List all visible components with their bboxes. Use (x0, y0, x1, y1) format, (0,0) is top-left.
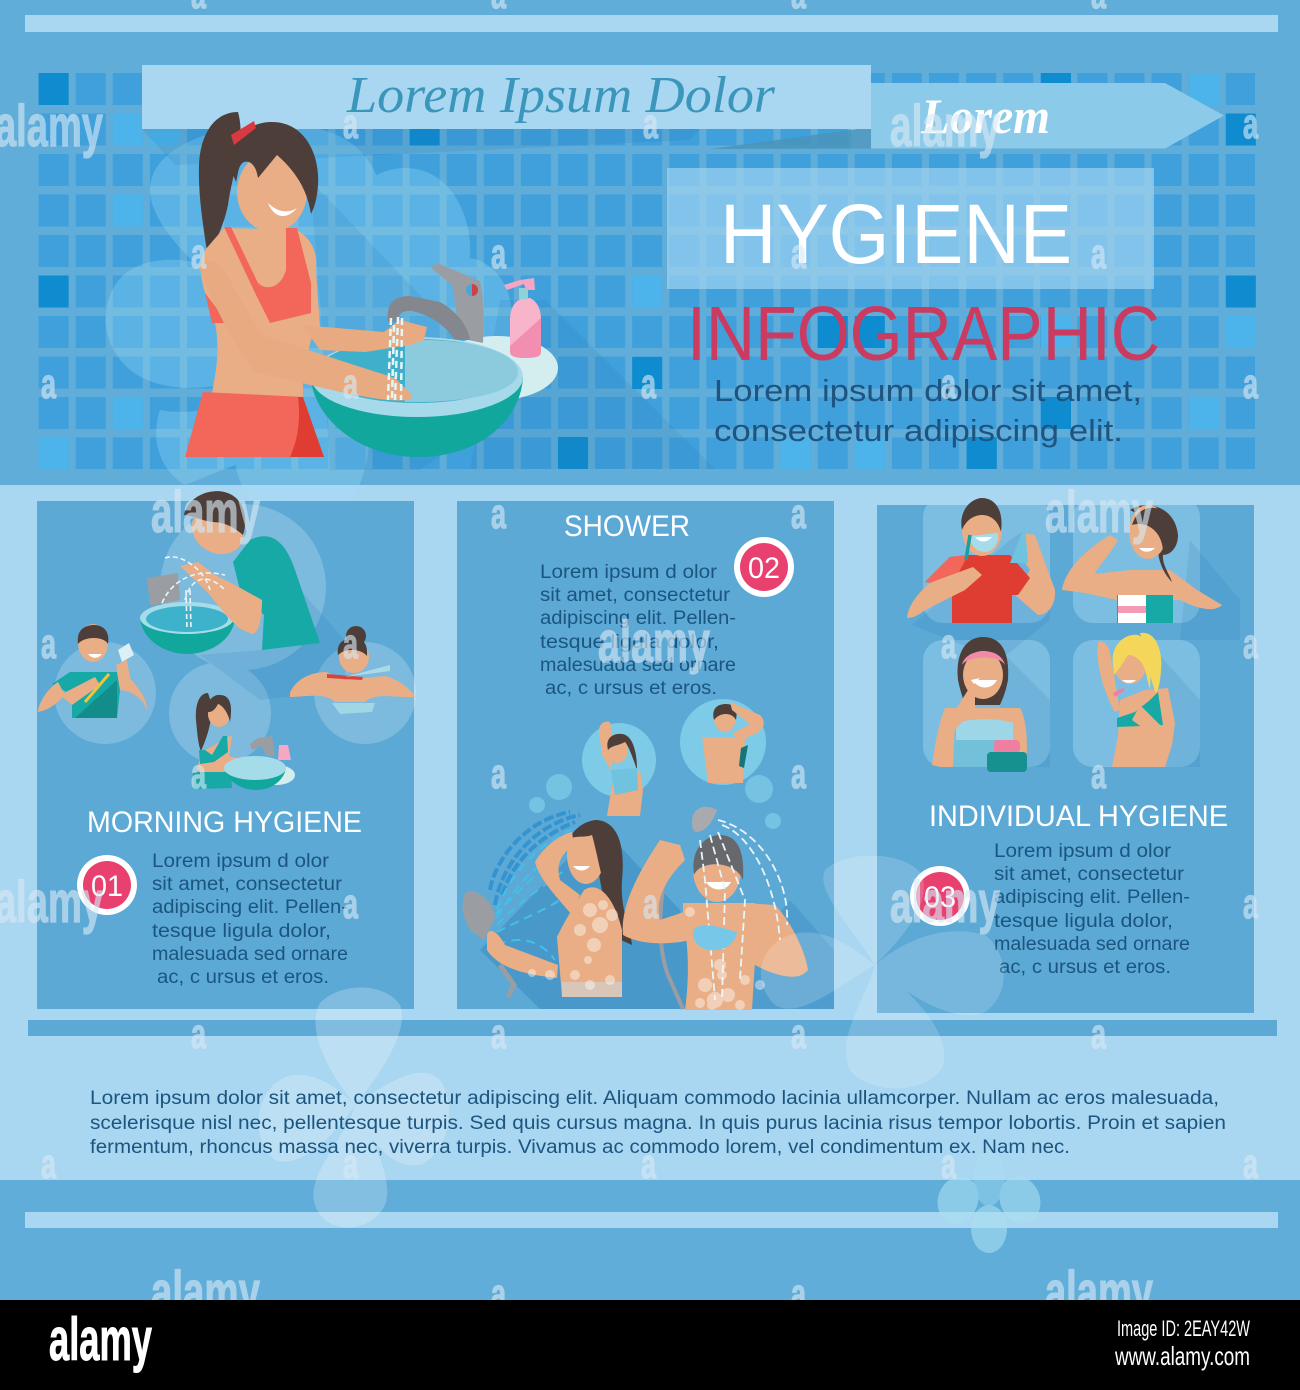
watermark: stock marks: alamy (890, 870, 1000, 935)
watermark: stock marks: a (41, 360, 56, 407)
watermark: stock marks: a (343, 100, 358, 147)
watermark: stock marks: a (1091, 1010, 1106, 1057)
text: paragraph: fermentum, rhoncus massa nec, viverra turpis. Vivamus ac commodo lorem, vel condimentum ex. Nam nec. (90, 1137, 1070, 1158)
icon tiles: individual (923, 497, 1200, 767)
watermark: stock marks: a (643, 100, 658, 147)
figure: woman with cream (932, 637, 1050, 772)
text: hero subtitle: Lorem ipsum dolor sit amet, (714, 373, 1142, 408)
band: footer blue (0, 1180, 1300, 1300)
text: morning body (152, 851, 348, 988)
flower: lower left flower (259, 987, 449, 1228)
band: lower light area (0, 485, 1300, 1180)
figure: torso (201, 228, 320, 397)
text: website: www.alamy.com (1114, 1341, 1250, 1371)
text: shower body: ac, c ursus et eros. (545, 678, 717, 699)
watermark: stock marks: a (643, 880, 658, 927)
flower: large hero flower (106, 125, 512, 531)
watermark: stock marks: alamy (151, 1260, 260, 1325)
watermark: stock marks: a (941, 1140, 956, 1187)
watermark: stock marks: a (641, 360, 656, 407)
figure: woman flossing (1062, 505, 1240, 640)
figure: woman brushing teeth (290, 626, 415, 714)
watermark: stock marks: a (791, 230, 806, 277)
text: morning body: sit amet, consectetur (152, 874, 343, 895)
illustration: woman washing hands at sink (185, 112, 715, 470)
watermark: stock marks: a (1243, 360, 1258, 407)
icon: bubbles (528, 900, 765, 1010)
watermark: stock marks: a (1243, 620, 1258, 667)
figure: man shaving (907, 498, 1055, 660)
shadow: shower figures (480, 825, 700, 1009)
watermark: stock marks: a (1243, 880, 1258, 927)
text: morning body: tesque ligula dolor, (152, 921, 331, 942)
watermark: stock marks: alamy (151, 480, 260, 545)
figure: man brushing teeth (38, 624, 147, 718)
watermark: stock marks: a (41, 1140, 56, 1187)
text: shower body: malesuada sed ornare (540, 655, 736, 676)
watermark: stock marks: a (191, 1010, 206, 1057)
figure: shorts (185, 392, 324, 457)
watermark: stock marks: a (791, 490, 806, 537)
text: individual body: ac, c ursus et eros. (999, 957, 1171, 978)
icon: water stream (388, 317, 402, 400)
watermark: stock marks: alamy (598, 610, 710, 675)
text: individual body: tesque ligula dolor, (994, 911, 1173, 932)
text: individual body: malesuada sed ornare (994, 934, 1190, 955)
icon: ponytail (199, 112, 241, 258)
title: HYGIENE: HYGIENE (720, 187, 1072, 281)
banner: title ribbon (142, 65, 871, 129)
figure: woman deodorant (599, 722, 643, 816)
title: shower: SHOWER (564, 510, 690, 543)
badge: 01 (77, 855, 137, 915)
icon: basin faucet (147, 573, 180, 606)
icon circles: morning (54, 504, 416, 764)
text: Lorem Ipsum Dolor: Lorem Ipsum Dolor (346, 67, 776, 124)
text: shower body: adipiscing elit. Pellen- (540, 608, 736, 629)
text: morning body: Lorem ipsum d olor (152, 851, 330, 872)
figure: smile (268, 203, 297, 216)
heading panel: hygiene (667, 168, 1154, 289)
text: morning body: adipiscing elit. Pellen- (152, 897, 348, 918)
watermark: stock marks: a (941, 360, 956, 407)
watermark: stock marks: a (491, 1010, 506, 1057)
divider: mid bar (28, 1020, 1277, 1036)
text: shower body (540, 562, 736, 699)
text: individual body (994, 841, 1190, 978)
badge: 03 (910, 866, 970, 926)
badge: 01: 01 (91, 870, 123, 903)
band: bottom bar (25, 1212, 1278, 1228)
figure: man showering (623, 807, 808, 1010)
icon: sink bowl (311, 337, 523, 457)
watermark: stock marks: a (1091, 750, 1106, 797)
panel: morning hygiene (37, 491, 416, 1009)
icon circles: shower (529, 699, 781, 829)
footer: black credit strip (0, 1300, 1300, 1390)
logo: alamy: alamy (49, 1306, 152, 1373)
icon: basin (140, 602, 235, 654)
watermark: stock marks: a (491, 230, 506, 277)
title: individual hygiene: INDIVIDUAL HYGIENE (929, 800, 1228, 833)
watermark: stock marks: a (491, 490, 506, 537)
flower: footer flower (931, 1150, 1047, 1253)
watermark: stock marks: a (491, 1270, 506, 1317)
figure: man washing face (140, 491, 320, 654)
watermark: stock marks: alamy (890, 94, 1000, 159)
text: hero subtitle (714, 373, 1142, 448)
figure: woman showering (463, 812, 632, 997)
figure: blonde woman shaving (1097, 633, 1200, 767)
band: top bar (25, 15, 1278, 32)
figure: man deodorant (702, 702, 764, 783)
watermark: stock marks: a (343, 620, 358, 667)
badge: 02: 02 (748, 552, 780, 585)
text: shower body: sit amet, consectetur (540, 585, 731, 606)
watermark: stock marks: a (191, 750, 206, 797)
text: individual body: Lorem ipsum d olor (994, 841, 1172, 862)
watermark: stock marks: a (791, 750, 806, 797)
figure: bra (205, 227, 311, 323)
text: individual body: sit amet, consectetur (994, 864, 1185, 885)
text: morning body: malesuada sed ornare (152, 944, 348, 965)
text: shower body: tesque ligula dolor, (540, 632, 719, 653)
watermark: stock marks: alamy (1045, 480, 1153, 545)
watermark: stock marks: a (491, 750, 506, 797)
watermark: stock marks: a (641, 1140, 656, 1187)
watermark: stock marks: a (1243, 100, 1258, 147)
figure: hair (231, 122, 318, 214)
watermark: stock marks: a (791, 1010, 806, 1057)
icon: soap dispenser (504, 278, 541, 358)
flower: right panel flower (761, 856, 1004, 1089)
badge: 02 (734, 537, 794, 597)
badge: 03: 03 (924, 881, 956, 914)
watermark: stock marks: a (1243, 1140, 1258, 1187)
text: shower body: Lorem ipsum d olor (540, 562, 718, 583)
watermark: stock marks: a (941, 620, 956, 667)
figure: small woman at sink (193, 693, 295, 790)
text: morning body: ac, c ursus et eros. (157, 967, 329, 988)
text: individual body: adipiscing elit. Pellen- (994, 887, 1190, 908)
text: paragraph: scelerisque nisl nec, pellentesque turpis. Sed quis cursus magna. In quis purus lacinia risus tempor lobortis. Proin et sapien (90, 1113, 1226, 1134)
panel: individual hygiene (877, 497, 1254, 1013)
watermark: stock marks: a (1091, 230, 1106, 277)
arrow: Lorem ribbon (710, 83, 1224, 149)
panel: tile wall (38, 73, 1256, 469)
title: INFOGRAPHIC: INFOGRAPHIC (687, 291, 1160, 377)
figure: arms (199, 261, 427, 401)
band: banner shadow (142, 129, 700, 165)
watermark: stock marks: alamy (1045, 1260, 1153, 1325)
text: Lorem: Lorem (920, 88, 1050, 144)
watermark: stock marks: a (343, 360, 358, 407)
icon: sink shelf (436, 336, 558, 400)
watermark: stock marks: a (343, 1140, 358, 1187)
figure: head (237, 152, 307, 232)
watermark: stock marks: a (41, 620, 56, 667)
watermark: stock marks: a (343, 880, 358, 927)
icon: faucet (388, 263, 484, 343)
watermark: stock marks: a (791, 1270, 806, 1317)
watermark: stock marks: a (191, 230, 206, 277)
title: morning hygiene: MORNING HYGIENE (87, 806, 362, 839)
text: paragraph: Lorem ipsum dolor sit amet, consectetur adipiscing elit. Aliquam commodo lacinia ullamcorper. Nullam ac eros malesuada, (90, 1088, 1219, 1109)
text: hero subtitle: consectetur adipiscing elit. (714, 413, 1123, 448)
text: paragraph (90, 1088, 1226, 1158)
panel: shower (457, 501, 834, 1010)
